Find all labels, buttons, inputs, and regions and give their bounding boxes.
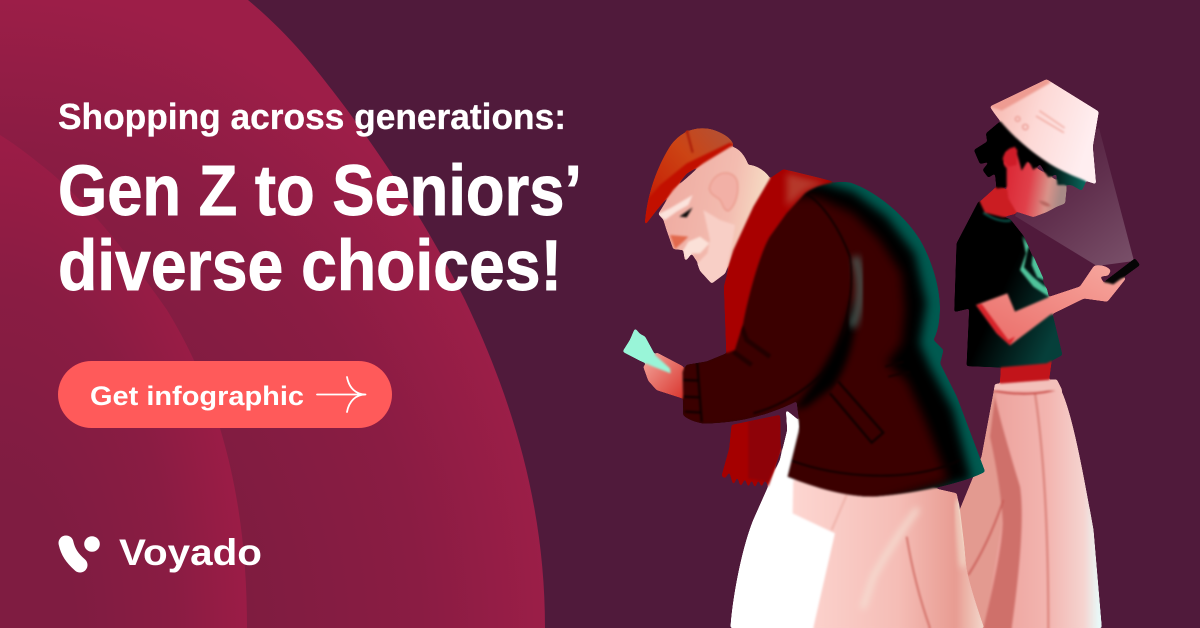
scarf lower part xyxy=(722,415,781,488)
face xyxy=(1003,145,1067,217)
neck xyxy=(980,187,1017,217)
scarf upper part xyxy=(724,169,833,359)
beanie xyxy=(645,128,733,225)
illustration: senior with receipt xyxy=(623,128,997,628)
outer arc shape xyxy=(0,0,545,628)
jacket xyxy=(681,181,984,498)
ear xyxy=(709,173,738,211)
receipt xyxy=(623,328,671,373)
shirt graphic xyxy=(1020,236,1049,297)
bucket hat xyxy=(990,79,1099,184)
brow and eye xyxy=(658,195,693,220)
phone xyxy=(1104,258,1140,284)
young person figure xyxy=(933,79,1140,628)
ear xyxy=(1003,148,1017,167)
logo: Voyado: Voyado xyxy=(119,532,262,573)
illustration: young person with phone xyxy=(933,79,1140,628)
waistband xyxy=(1000,360,1052,384)
beard xyxy=(697,210,735,283)
title: Gen Z to Seniors’ xyxy=(58,152,582,231)
hair xyxy=(974,122,1086,191)
head xyxy=(658,147,770,283)
hand xyxy=(643,353,683,399)
subtitle: Shopping across generations: xyxy=(58,96,566,137)
button: get infographic: Get infographic xyxy=(90,381,304,411)
button: get infographic xyxy=(58,361,392,428)
title: diverse choices! xyxy=(58,227,562,306)
arm and hand xyxy=(976,265,1127,345)
white trousers xyxy=(731,410,984,628)
jacket seams xyxy=(753,194,851,413)
title xyxy=(58,152,582,306)
light cone from phone xyxy=(1015,128,1134,266)
t-shirt xyxy=(954,201,1062,367)
wide trousers xyxy=(933,385,1102,628)
logo: Voyado xyxy=(66,532,262,573)
inner arc shape xyxy=(0,135,247,628)
